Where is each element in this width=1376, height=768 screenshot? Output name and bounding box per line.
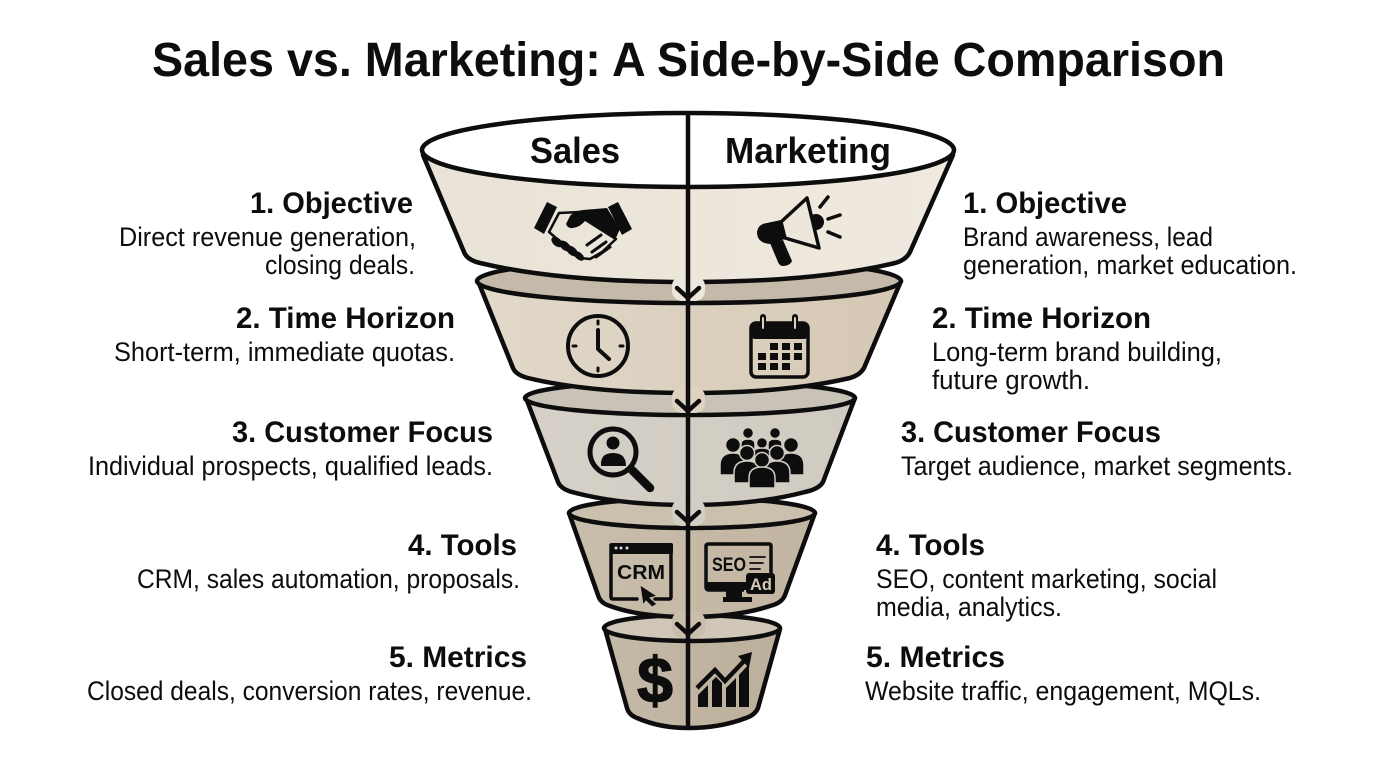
Ad label: Ad: [750, 575, 772, 594]
icon: clock: [568, 316, 628, 376]
right text: metrics: Website traffic, engagement, MQLs.: [865, 676, 1261, 706]
right text: objective: Brand awareness, lead: [963, 222, 1213, 252]
connector patch 4 to 5: [672, 611, 705, 638]
funnel tier 5: metrics: [604, 615, 780, 728]
right text: objective: [963, 187, 1297, 280]
left text: customer focus: 3. Customer Focus: [232, 416, 493, 449]
left text: time horizon: 2. Time Horizon: [236, 302, 455, 335]
right text: customer focus: [901, 416, 1293, 481]
right text: tools: SEO, content marketing, social: [876, 564, 1217, 594]
icon: growth chart: [697, 652, 752, 707]
right text: objective: 1. Objective: [963, 187, 1127, 220]
right text: time horizon: future growth.: [932, 365, 1090, 395]
right text: metrics: [865, 641, 1261, 706]
icon: magnifier with person: [590, 429, 650, 488]
icon: megaphone: [757, 197, 840, 266]
icon: CRM window: [610, 543, 673, 607]
left text: objective: [119, 187, 416, 280]
funnel tier 4: tools: [569, 498, 815, 638]
funnel diagram: [422, 112, 954, 728]
left text: metrics: [87, 641, 532, 706]
funnel tier 3: customer focus: [525, 381, 855, 526]
left text: objective: 1. Objective: [250, 187, 413, 220]
left text: time horizon: [114, 302, 455, 367]
connector patch 2 to 3: [672, 387, 705, 413]
left text: tools: [137, 529, 520, 594]
funnel tier 1: objective: [422, 113, 954, 301]
right text: time horizon: [932, 302, 1222, 395]
icon: audience group: [720, 428, 804, 488]
SEO label: SEO: [712, 555, 746, 576]
left text: metrics: 5. Metrics: [389, 641, 527, 674]
funnel mouth: [422, 113, 954, 187]
icon: handshake: [534, 202, 632, 263]
column heading: Marketing: Marketing: [725, 130, 891, 171]
icon: calendar: [751, 317, 808, 377]
title: Sales vs. Marketing: A Side-by-Side Comparison: [152, 34, 1225, 87]
right text: tools: 4. Tools: [876, 529, 985, 562]
left text: tools: CRM, sales automation, proposals.: [137, 564, 520, 594]
right text: tools: media, analytics.: [876, 592, 1062, 622]
left text: customer focus: Individual prospects, qualified leads.: [88, 451, 493, 481]
right text: metrics: 5. Metrics: [866, 641, 1005, 674]
left text: objective: closing deals.: [265, 250, 415, 280]
right text: time horizon: 2. Time Horizon: [932, 302, 1151, 335]
left text: time horizon: Short-term, immediate quotas.: [114, 337, 455, 367]
left text: metrics: Closed deals, conversion rates, revenue.: [87, 676, 532, 706]
right text: tools: [876, 529, 1217, 622]
connector patch 3 to 4: [672, 499, 705, 526]
right text: objective: generation, market education.: [963, 250, 1297, 280]
column heading: Sales: Sales: [530, 130, 620, 171]
right text: customer focus: Target audience, market segments.: [901, 451, 1293, 481]
right text: customer focus: 3. Customer Focus: [901, 416, 1161, 449]
center divider with arrows: [677, 112, 699, 728]
funnel tier 2: time horizon: [477, 259, 901, 413]
right text: time horizon: Long-term brand building,: [932, 337, 1222, 367]
CRM label: CRM: [617, 562, 665, 584]
left text: tools: 4. Tools: [408, 529, 517, 562]
icon: dollar sign: $: [637, 644, 673, 716]
left text: objective: Direct revenue generation,: [119, 222, 416, 252]
connector patch 1 to 2: [672, 276, 705, 301]
icon: SEO monitor with ad: [706, 544, 775, 602]
left text: customer focus: [88, 416, 493, 481]
